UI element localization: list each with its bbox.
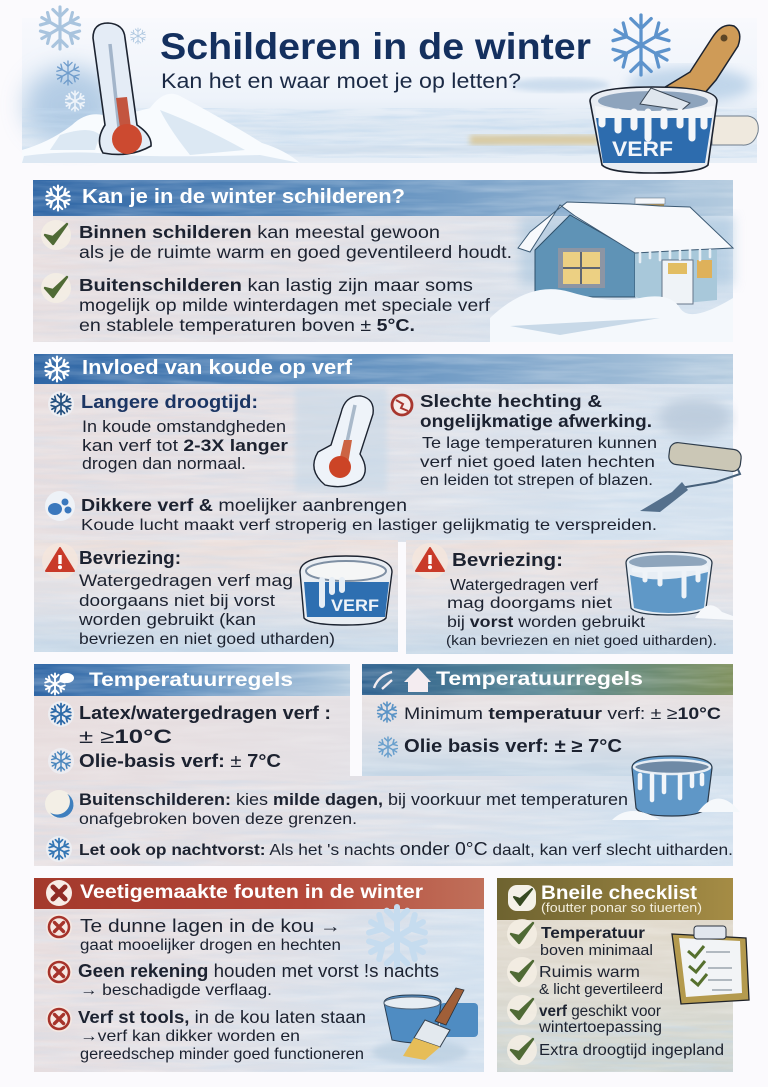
item: te dunne lagen: gaat mooelijker drogen en hechten [80, 937, 341, 954]
item: buitenschilderen: en stablele temperaturen boven ± 5°C. [79, 315, 415, 335]
item: buitenschilderen [45, 790, 628, 828]
item: temperatuur [507, 919, 653, 959]
text: bevriezing right [446, 550, 717, 648]
item: verfst tools: →verf kan dikker worden en [80, 1028, 300, 1045]
decorative snowflakes [38, 7, 672, 111]
item: verfst tools: Verf st tools, in de kou laten staan [78, 1007, 366, 1027]
icon: warning [42, 543, 78, 579]
text: bevriezing right: Watergedragen verf [450, 577, 599, 594]
panel: kan je in de winter schilderen [33, 180, 733, 342]
icon: paint can VERF [300, 556, 392, 625]
item: temperatuur: boven minimaal [540, 942, 653, 959]
item: verf geschikt [507, 995, 662, 1036]
header banner [22, 7, 757, 163]
text: bevriezing left [78, 548, 335, 648]
heading: invloed van koude op verf: Invloed van koude op verf [82, 357, 352, 379]
icon: snowflake [366, 907, 428, 967]
heading: temperatuurregels left [44, 669, 293, 694]
item: binnen schilderen: Binnen schilderen kan meestal gewoon [79, 222, 440, 242]
icon: frozen paint can [626, 552, 733, 620]
item: geen rekening [46, 959, 439, 999]
item: latex: ± ≥ 10°C [79, 727, 172, 748]
text: bevriezing right: (kan bevriezen en niet goed uitharden). [446, 632, 717, 648]
panel: temperatuurregels main [34, 664, 733, 866]
item: ruimte warm: Ruimis warm [539, 964, 640, 981]
item: nachtvorst: Let ook op nachtvorst: Als het 's nachts onder 0°C daalt, kan verf slecht uitharden. [79, 839, 733, 859]
panel: temperatuurregels right [362, 664, 733, 776]
item: slechte hechting: en leiden tot strepen of blazen. [420, 472, 653, 489]
item: verf geschikt: verf geschikt voor [539, 1003, 661, 1020]
panel: veelgemaakte fouten [34, 878, 484, 1072]
item: te dunne lagen [46, 914, 341, 954]
item: slechte hechting: Slechte hechting & [420, 391, 602, 411]
subtitle: Kan het en waar moet je op letten? [161, 70, 521, 93]
text: bevriezing right: mag doorgams niet [447, 595, 613, 612]
heading: checklist: (foutter ponar so tiuerten) [541, 901, 702, 915]
item: dikkere verf: Koude lucht maakt verf stroperig en lastiger gelijkmatig te verspreiden. [81, 517, 657, 534]
item: dikkere verf [45, 491, 657, 534]
panel: snelle checklist [497, 878, 749, 1072]
text: bevriezing right: bij vorst worden gebruikt [447, 614, 646, 631]
item: buitenschilderen: onafgebroken boven deze grenzen. [79, 811, 357, 828]
item: langere droogtijd: Langere droogtijd: [81, 392, 258, 412]
heading: fouten: Veetigemaakte fouten in de winter [80, 881, 423, 903]
item: buitenschilderen: Buitenschilderen kan lastig zijn maar soms [79, 275, 473, 295]
item: dikkere verf: Dikkere verf & moelijker aanbrengen [81, 495, 407, 515]
item: slechte hechting: Te lage temperaturen kunnen [422, 435, 657, 452]
icon: paint can with brush and roll [590, 25, 758, 173]
item: langere droogtijd: drogen dan normaal. [82, 455, 246, 473]
item: slechte hechting: ongelijkmatige afwerking. [420, 411, 652, 431]
item: langere droogtijd: kan verf tot 2-3X langer [82, 437, 289, 455]
icon: bucket and brush [372, 988, 478, 1064]
icon: snowy paint can [612, 756, 740, 820]
item: ruimte warm: & licht gevertileerd [539, 981, 663, 998]
item: geen rekening: Geen rekening houden met vorst !s nachts [78, 961, 439, 981]
item: extra droogtijd: Extra droogtijd ingepland [539, 1042, 724, 1059]
icon: thermometer [93, 23, 151, 154]
item: temperatuur: Temperatuur [541, 925, 645, 942]
text: bevriezing left: bevriezen en niet goed utharden) [79, 631, 335, 648]
icon: clipboard [672, 926, 749, 1004]
icon: paint can with brush and roll: VERF [612, 138, 673, 161]
item: buitenschilderen [41, 273, 490, 335]
title: Schilderen in de winter [160, 26, 591, 67]
item: latex [48, 701, 331, 748]
item: langere droogtijd [48, 391, 289, 473]
heading: temperatuurregels right [374, 668, 643, 692]
item: buitenschilderen: mogelijk op milde winterdagen met speciale verf [79, 295, 490, 315]
item: verfst tools: gereedschep minder goed functioneren [80, 1046, 364, 1063]
text: bevriezing left: doorgaans niet bij vorst [79, 592, 275, 610]
heading: kan je in de winter schilderen: Kan je in de winter schilderen? [82, 186, 405, 208]
item: slechte hechting [392, 391, 657, 489]
item: verf geschikt: wintertoepassing [538, 1019, 662, 1036]
item: verfst tools [46, 1006, 366, 1063]
item: te dunne lagen: Te dunne lagen in de kou → [80, 916, 341, 936]
text: bevriezing left: Watergedragen verf mag [79, 572, 293, 590]
item: olie-basis: Olie-basis verf: ± 7°C [79, 751, 281, 771]
icon: thermometer [295, 388, 387, 491]
item: extra droogtijd [507, 1035, 724, 1065]
heading: checklist [508, 883, 702, 915]
heading: checklist: Bneile checklist [541, 883, 698, 904]
item: olie basis: Olie basis verf: ± ≥ 7°C [404, 736, 622, 756]
text: bevriezing left: worden gebruikt (kan [78, 611, 256, 629]
icon: paint roller [640, 398, 742, 512]
item: slechte hechting: verf niet goed laten hechten [420, 454, 655, 471]
item: buitenschilderen: Buitenschilderen: kies milde dagen, bij voorkuur met temperaturen [79, 791, 628, 809]
panel: bevriezing left [34, 540, 398, 652]
item: langere droogtijd: In koude omstandgheden [82, 418, 286, 436]
item: ruimte warm [507, 957, 663, 998]
item: binnen schilderen: als je de ruimte warm en goed geventileerd houdt. [79, 242, 512, 262]
panel: invloed van koude op verf [34, 354, 742, 542]
item: latex: Latex/watergedragen verf : [79, 703, 331, 723]
icon: warning [412, 543, 448, 579]
item: minimum temperatuur: Minimum temperatuur verf: ± ≥ 10°C [404, 704, 721, 723]
item: binnen schilderen [41, 220, 512, 262]
item: geen rekening: → beschadigde verflaag. [80, 982, 272, 999]
text: bevriezing left: Bevriezing: [79, 548, 181, 568]
panel: bevriezing right [406, 540, 733, 654]
illustration: snowy house [490, 198, 733, 342]
icon: paint can VERF: VERF [331, 596, 379, 615]
text: bevriezing right: Bevriezing: [452, 550, 563, 570]
item: olie-basis [48, 748, 281, 774]
heading: temperatuurregels left: Temperatuurregels [89, 669, 293, 691]
heading: temperatuurregels right: Temperatuurregels [436, 668, 643, 690]
